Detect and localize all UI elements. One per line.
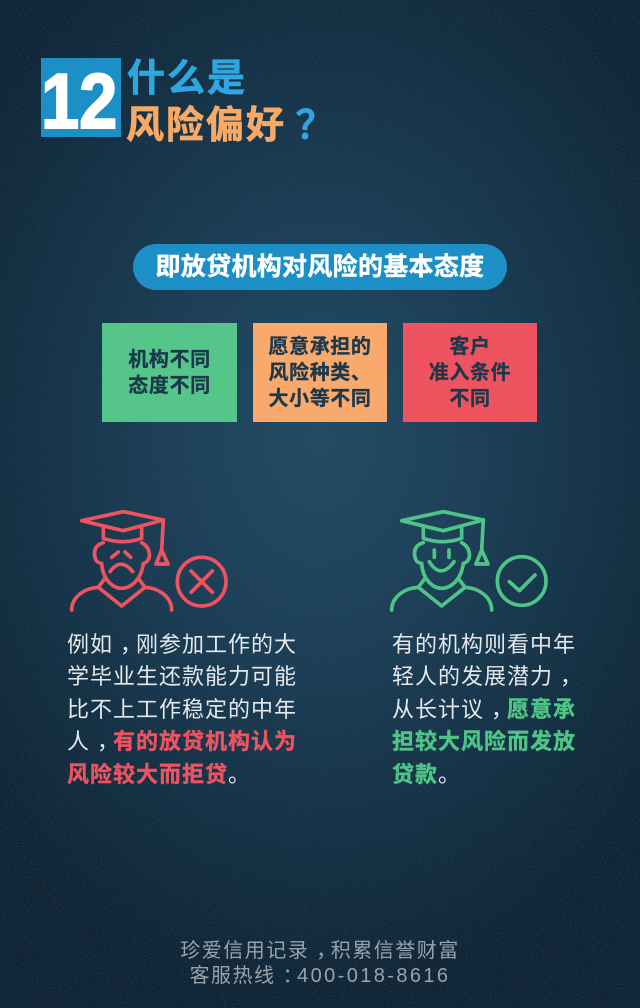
title line 1: 什么是 bbox=[127, 58, 247, 100]
card: risk appetite differs bbox=[253, 323, 387, 422]
text block: left example: 学毕业生还款能力可能 bbox=[67, 664, 297, 689]
subtitle pill: 即放贷机构对风险的基本态度 bbox=[156, 253, 484, 281]
card: risk appetite differs: 大小等不同 bbox=[268, 388, 372, 410]
footer slogan and hotline: 客服热线 ：400-018-8616 bbox=[190, 965, 450, 987]
card: institutions differ bbox=[102, 323, 237, 422]
text block: right example bbox=[392, 632, 583, 786]
icon: sad graduate with cross bbox=[70, 510, 228, 612]
text block: right example: 有的机构则看中年 bbox=[392, 632, 576, 656]
footer slogan and hotline bbox=[180, 940, 460, 987]
text block: right example: 贷款。 bbox=[392, 762, 461, 786]
icon: happy graduate with check bbox=[390, 510, 548, 612]
card: customer admission: 客户 bbox=[449, 336, 491, 358]
text block: left example: 风险较大而拒贷。 bbox=[67, 762, 251, 786]
text block: left example bbox=[67, 632, 297, 786]
subtitle pill bbox=[133, 244, 507, 290]
card: institutions differ: 机构不同 bbox=[128, 349, 211, 371]
card: customer admission bbox=[403, 323, 537, 422]
title line 2: 风险偏好 ？ bbox=[126, 105, 336, 147]
card: customer admission: 准入条件 bbox=[429, 362, 511, 384]
text block: right example: 从长计议 ，愿意承 bbox=[392, 696, 576, 722]
card: institutions differ: 态度不同 bbox=[128, 375, 211, 397]
footer slogan and hotline: 珍爱信用记录 ，积累信誉财富 bbox=[180, 940, 460, 962]
card: risk appetite differs: 风险种类、 bbox=[268, 362, 372, 384]
text block: left example: 例如 ，刚参加工作的大 bbox=[67, 632, 297, 656]
text block: right example: 轻人的发展潜力 ， bbox=[392, 664, 583, 689]
card: risk appetite differs: 愿意承担的 bbox=[268, 336, 372, 358]
text block: right example: 担较大风险而发放 bbox=[392, 729, 576, 754]
card: customer admission: 不同 bbox=[449, 388, 491, 410]
text block: left example: 比不上工作稳定的中年 bbox=[67, 696, 297, 722]
text block: left example: 人 ，有的放贷机构认为 bbox=[67, 729, 297, 754]
